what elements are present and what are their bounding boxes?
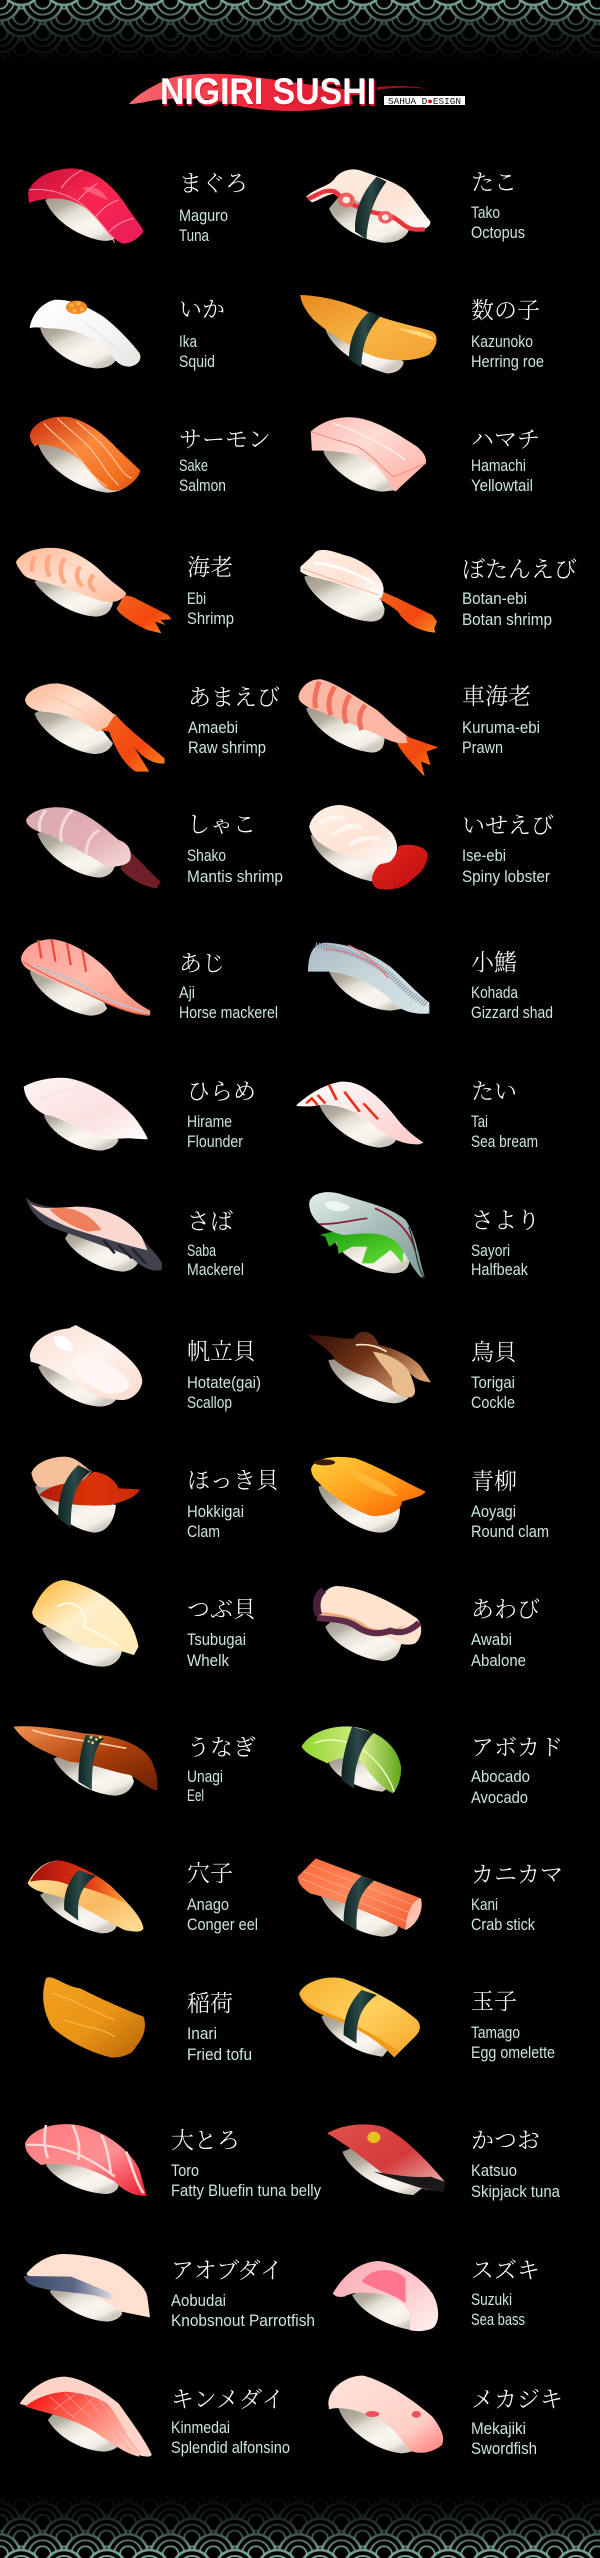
sushi: suzuki: [333, 2261, 438, 2331]
item: Botan-ebi: [300, 550, 577, 633]
label: Kani: カニカマ: [471, 1862, 563, 1887]
label: Ebi: Ebi: [187, 589, 206, 608]
item: Kazunoko: [300, 295, 544, 373]
sushi: inari: [43, 1977, 145, 2057]
logo badge: SAHUA D●ESIGN: [388, 97, 461, 107]
label: Kinmedai: キンメダイ: [171, 2387, 285, 2412]
item: Ise-ebi: [309, 805, 554, 890]
label: Hotate: Hotate(gai): [187, 1373, 261, 1392]
sushi: awabi: [316, 1586, 421, 1661]
sushi: kani: [298, 1858, 422, 1937]
label: Amaebi: Raw shrimp: [188, 738, 266, 757]
label: Inari: 稲荷: [187, 1991, 233, 2016]
item: Anago: [28, 1861, 258, 1934]
label: Kazunoko: [471, 298, 544, 371]
label: Hamachi: Hamachi: [471, 456, 526, 475]
red brush stroke: [129, 74, 353, 111]
sushi: tai: [297, 1082, 424, 1148]
label: Aji: Horse mackerel: [179, 1003, 278, 1022]
label: Suzuki: [471, 2258, 540, 2329]
sushi: sayori: [309, 1192, 425, 1277]
label: Sayori: Sayori: [471, 1241, 510, 1260]
item: Tako: [306, 169, 525, 243]
item: Mekajiki: [328, 2376, 563, 2458]
label: Suzuki: Sea bass: [471, 2310, 525, 2329]
label: Hamachi: ハマチ: [471, 427, 540, 452]
sushi: kazunoko: [300, 295, 437, 373]
item: Inari: [43, 1977, 252, 2064]
label: Anago: [187, 1861, 258, 1934]
label: Aoyagi: Round clam: [471, 1522, 549, 1541]
label: Toro: Toro: [171, 2161, 199, 2180]
label: Shako: Mantis shrimp: [187, 867, 283, 886]
label: Aoyagi: 青柳: [471, 1469, 517, 1494]
label: Hotate: [187, 1339, 261, 1412]
label: Tako: Octopus: [471, 223, 525, 242]
label: Kani: Crab stick: [471, 1915, 535, 1934]
label: Toro: 大とろ: [171, 2128, 240, 2153]
thin brush tail: [377, 86, 428, 90]
item: Sayori: [309, 1192, 540, 1279]
label: Awabi: Awabi: [471, 1630, 512, 1649]
label: Hokkigai: Clam: [187, 1522, 220, 1541]
label: Mekajiki: Swordfish: [471, 2439, 537, 2458]
label: Anago: Conger eel: [187, 1915, 258, 1934]
label: Kohada: [471, 950, 553, 1022]
item: Maguro: [28, 168, 248, 245]
sushi: aobudai: [24, 2254, 150, 2322]
label: Botan-ebi: Botan-ebi: [462, 589, 527, 608]
sushi: hirame: [24, 1078, 148, 1151]
label: Hirame: Flounder: [187, 1132, 243, 1151]
item: Awabi: [316, 1586, 540, 1670]
label: Inari: [187, 1991, 252, 2064]
label: Tamago: 玉子: [471, 1989, 517, 2014]
label: Saba: Saba: [187, 1241, 216, 1260]
label: Botan-ebi: Botan shrimp: [462, 610, 552, 629]
label: Tai: Sea bream: [471, 1132, 538, 1151]
label: Torigai: [471, 1340, 517, 1412]
label: Hokkigai: [187, 1468, 279, 1541]
label: Tai: [471, 1079, 538, 1151]
label: Maguro: Maguro: [179, 206, 228, 225]
label: Tsubugai: つぶ貝: [187, 1597, 256, 1622]
item: Torigai: [307, 1332, 517, 1412]
label: Tai: Tai: [471, 1112, 488, 1131]
sushi: ika: [30, 300, 140, 368]
label: Shako: [187, 812, 283, 886]
label: Sake: Salmon: [179, 476, 226, 495]
label: Tako: たこ: [471, 170, 517, 195]
label: Ise-ebi: [462, 813, 554, 886]
label: Katsuo: Skipjack tuna: [471, 2182, 560, 2201]
item: Shako: [26, 807, 283, 888]
sushi: amaebi: [25, 683, 165, 772]
top wave pattern band: [0, 0, 600, 67]
label: Saba: さば: [187, 1209, 233, 1234]
label: Maguro: Tuna: [179, 226, 209, 245]
label: Maguro: まぐろ: [179, 171, 248, 196]
label: Suzuki: スズキ: [471, 2258, 540, 2283]
item: Hamachi: [311, 417, 540, 495]
label: Ise-ebi: いせえび: [462, 813, 554, 838]
label: Toro: [171, 2128, 321, 2200]
label: Hamachi: Yellowtail: [471, 476, 533, 495]
sushi: tamago: [299, 1977, 420, 2057]
title shadow: NIGIRI SUSHI: [161, 73, 377, 114]
label: Botan-ebi: ぼたんえび: [462, 557, 577, 582]
label: Shako: しゃこ: [187, 812, 256, 837]
sushi: ise ebi: [309, 805, 428, 890]
label: Ebi: Shrimp: [187, 609, 234, 628]
label: Sake: サーモン: [179, 427, 271, 452]
sushi: hokkigai: [31, 1457, 140, 1533]
item: Suzuki: [333, 2258, 540, 2331]
item: Tamago: [299, 1977, 555, 2062]
item: Kohada: [308, 943, 553, 1022]
label: Unagi: Eel: [187, 1786, 204, 1805]
label: Kuruma-ebi: Kuruma-ebi: [462, 718, 540, 737]
sushi: unagi: [13, 1726, 158, 1796]
label: Awabi: [471, 1597, 540, 1670]
label: Amaebi: Amaebi: [188, 718, 238, 737]
label: Tsubugai: [187, 1597, 256, 1670]
label: Tamago: Tamago: [471, 2023, 520, 2042]
item: Aji: [21, 939, 278, 1022]
item: Saba: [26, 1197, 244, 1279]
label: Tamago: [471, 1989, 555, 2062]
label: Saba: [187, 1209, 244, 1279]
item: Kuruma-ebi: [298, 679, 540, 777]
sushi: toro: [25, 2124, 147, 2196]
sushi: mekajiki: [328, 2376, 443, 2453]
item: Aoyagi: [311, 1457, 549, 1541]
label: Mekajiki: [471, 2387, 563, 2458]
label: Aobudai: アオブダイ: [171, 2258, 283, 2283]
label: Katsuo: [471, 2128, 560, 2201]
label: Torigai: 鳥貝: [471, 1340, 517, 1365]
label: Katsuo: Katsuo: [471, 2161, 517, 2180]
label: Kohada: Kohada: [471, 983, 518, 1002]
label: Suzuki: Suzuki: [471, 2290, 512, 2309]
label: Tako: Tako: [471, 203, 500, 222]
label: Kuruma-ebi: Prawn: [462, 738, 503, 757]
label: Unagi: Unagi: [187, 1767, 223, 1786]
label: Awabi: Abalone: [471, 1651, 526, 1670]
label: Katsuo: かつお: [471, 2128, 540, 2153]
sushi: kinmedai: [20, 2377, 152, 2457]
item: Hokkigai: [31, 1457, 279, 1541]
label: Amaebi: [188, 685, 280, 757]
label: Ebi: 海老: [187, 555, 233, 580]
label: Aoyagi: [471, 1469, 549, 1541]
label: Mekajiki: Mekajiki: [471, 2419, 526, 2438]
item: Hirame: [24, 1078, 256, 1151]
item: Ebi: [16, 548, 234, 633]
item: Kani: [298, 1858, 563, 1937]
label: Inari: Fried tofu: [187, 2045, 252, 2064]
label: Aobudai: [171, 2258, 315, 2330]
label: Abocado: [471, 1735, 563, 1807]
label: Tsubugai: Tsubugai: [187, 1630, 246, 1649]
label: Tamago: Egg omelette: [471, 2043, 555, 2062]
item: Tai: [297, 1079, 538, 1151]
label: Torigai: Cockle: [471, 1393, 515, 1412]
label: Torigai: Torigai: [471, 1373, 515, 1392]
label: Hotate: 帆立貝: [187, 1339, 256, 1364]
label: Kuruma-ebi: 車海老: [462, 684, 531, 709]
sushi: sake: [30, 417, 140, 493]
label: Sake: [179, 427, 271, 495]
sushi: tako: [306, 169, 430, 243]
label: Aobudai: Aobudai: [171, 2291, 226, 2310]
label: Aoyagi: Aoyagi: [471, 1502, 516, 1521]
label: Ise-ebi: Ise-ebi: [462, 846, 506, 865]
label: Maguro: [179, 171, 248, 245]
bottom wave pattern band: [0, 2488, 600, 2558]
label: Ika: いか: [179, 297, 225, 322]
label: Kani: [471, 1862, 563, 1934]
item: Katsuo: [327, 2124, 560, 2201]
label: Aobudai: Knobsnout Parrotfish: [171, 2311, 315, 2330]
sushi: ebi: [16, 548, 171, 633]
item: Ika: [30, 297, 225, 371]
sushi: shako: [26, 807, 161, 888]
sushi: maguro: [28, 168, 143, 244]
label: Toro: Fatty Bluefin tuna belly: [171, 2181, 321, 2200]
label: Abocado: Abocado: [471, 1767, 530, 1786]
item: Amaebi: [25, 683, 280, 772]
label: Kani: Kani: [471, 1895, 498, 1914]
label: Unagi: うなぎ: [187, 1735, 256, 1760]
title: Nigiri Sushi: [129, 71, 428, 114]
sushi: anago: [28, 1861, 143, 1933]
label: Hokkigai: ほっき貝: [187, 1468, 279, 1493]
label: Unagi: [187, 1735, 256, 1805]
sushi: torigai: [307, 1332, 431, 1403]
item: Abocado: [302, 1726, 563, 1807]
sushi: katsuo: [327, 2124, 445, 2195]
sushi: kuruma ebi: [298, 679, 438, 777]
label: Kazunoko: 数の子: [471, 298, 540, 323]
label: Ika: Squid: [179, 352, 215, 371]
sushi: botan ebi: [300, 550, 437, 633]
label: Hamachi: [471, 427, 540, 495]
label: Sayori: [471, 1208, 540, 1279]
label: Ika: Ika: [179, 332, 197, 351]
sushi: avocado: [302, 1726, 401, 1793]
label: Tsubugai: Whelk: [187, 1651, 229, 1670]
label: Abocado: アボカド: [471, 1735, 563, 1760]
label: Kohada: 小鰭: [471, 950, 517, 975]
item: Aobudai: [24, 2254, 315, 2330]
label: Hokkigai: Hokkigai: [187, 1502, 244, 1521]
label: Botan-ebi: [462, 557, 577, 629]
item: Unagi: [13, 1726, 256, 1805]
label: Sayori: Halfbeak: [471, 1260, 528, 1279]
label: Ika: [179, 297, 225, 371]
label: Aji: Aji: [179, 983, 195, 1002]
label: Aji: [179, 951, 278, 1022]
label: Shako: Shako: [187, 846, 226, 865]
label: Kazunoko: Kazunoko: [471, 332, 533, 351]
sushi: tsubugai: [32, 1580, 139, 1667]
item: Sake: [30, 417, 271, 495]
sushi: aoyagi: [311, 1457, 426, 1533]
title text: NIGIRI SUSHI: [160, 71, 376, 112]
sushi: aji: [21, 939, 150, 1016]
label: Hirame: [187, 1079, 256, 1151]
item: Toro: [25, 2124, 321, 2200]
label: Kinmedai: Splendid alfonsino: [171, 2438, 290, 2457]
label: Abocado: Avocado: [471, 1788, 528, 1807]
sushi: kohada: [308, 943, 429, 1014]
label: Kinmedai: [171, 2387, 290, 2457]
label: Anago: 穴子: [187, 1861, 233, 1886]
label: Tai: たい: [471, 1079, 517, 1104]
label: Hirame: ひらめ: [187, 1079, 256, 1104]
label: Kohada: Gizzard shad: [471, 1003, 553, 1022]
label: Amaebi: あまえび: [188, 685, 280, 710]
label: Kazunoko: Herring roe: [471, 352, 544, 371]
sushi: hotate: [30, 1325, 142, 1407]
label: Saba: Mackerel: [187, 1260, 244, 1279]
label: Ebi: [187, 555, 234, 628]
sushi: hamachi: [311, 417, 426, 492]
label: Sayori: さより: [471, 1208, 540, 1233]
label: Awabi: あわび: [471, 1597, 540, 1622]
label: Inari: Inari: [187, 2024, 217, 2043]
sushi: saba: [26, 1197, 162, 1272]
item: Tsubugai: [32, 1580, 256, 1670]
label: Kinmedai: Kinmedai: [171, 2418, 230, 2437]
label: Sake: Sake: [179, 456, 208, 475]
label: Mekajiki: メカジキ: [471, 2387, 563, 2412]
label: Kuruma-ebi: [462, 684, 540, 757]
item: Hotate: [30, 1325, 261, 1412]
item: Kinmedai: [20, 2377, 290, 2457]
label: Aji: あじ: [179, 951, 225, 976]
label: Hotate: Scallop: [187, 1393, 232, 1412]
label: Hirame: Hirame: [187, 1112, 232, 1131]
label: Anago: Anago: [187, 1895, 229, 1914]
label: Ise-ebi: Spiny lobster: [462, 867, 550, 886]
label: Tako: [471, 170, 525, 242]
